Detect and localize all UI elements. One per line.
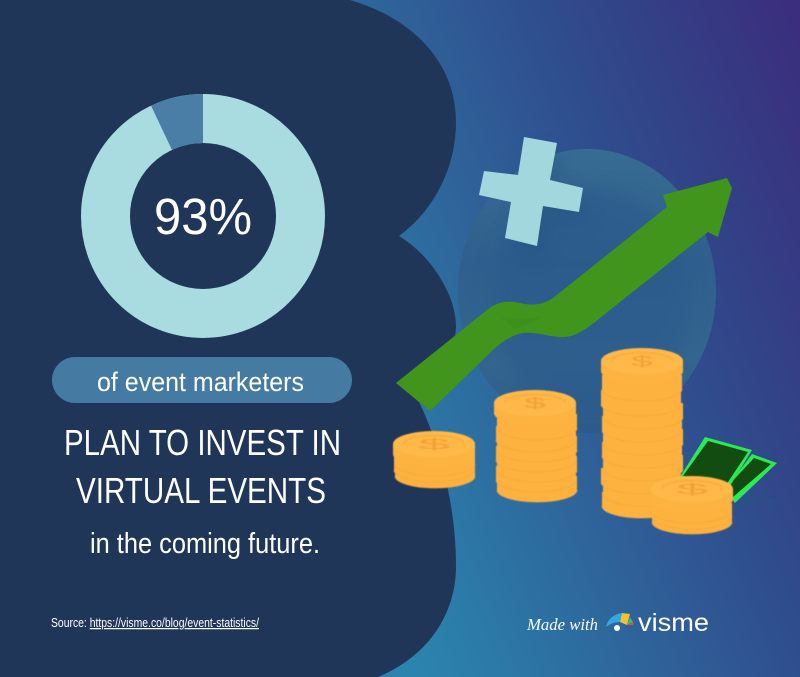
icon: banknotes xyxy=(680,437,777,504)
coin symbol: $ xyxy=(524,395,546,411)
subheading: in the coming future. xyxy=(90,528,320,560)
branding: Made with Visme: Made with xyxy=(526,615,598,634)
icon: plus sign xyxy=(479,137,589,259)
icon: visme logo xyxy=(606,613,634,631)
pill label: of event marketers: of event marketers xyxy=(97,367,304,397)
panel: navy scalloped shape xyxy=(0,0,456,677)
heading: VIRTUAL EVENTS xyxy=(76,470,326,511)
coin stack 3 xyxy=(601,348,683,518)
coin stack 1 xyxy=(393,431,475,488)
branding: Made with Visme: visme xyxy=(638,609,709,637)
donut chart: 93% xyxy=(106,94,300,314)
donut value: 93% xyxy=(154,188,252,245)
heading xyxy=(64,422,341,511)
coin stack 2 xyxy=(494,390,577,502)
coin symbol: $ xyxy=(631,353,653,369)
source line: Source: https://visme.co/blog/event-statistics/ xyxy=(51,616,259,630)
coin stack 4 xyxy=(651,476,733,534)
icon: growth arrow xyxy=(396,178,732,411)
pill label: of event marketers xyxy=(52,357,352,403)
decorative translucent circle xyxy=(458,149,716,433)
branding: Made with Visme xyxy=(526,609,709,637)
coin symbol: $ xyxy=(418,436,450,452)
heading: PLAN TO INVEST IN xyxy=(64,422,341,463)
coin symbol: $ xyxy=(676,481,708,497)
